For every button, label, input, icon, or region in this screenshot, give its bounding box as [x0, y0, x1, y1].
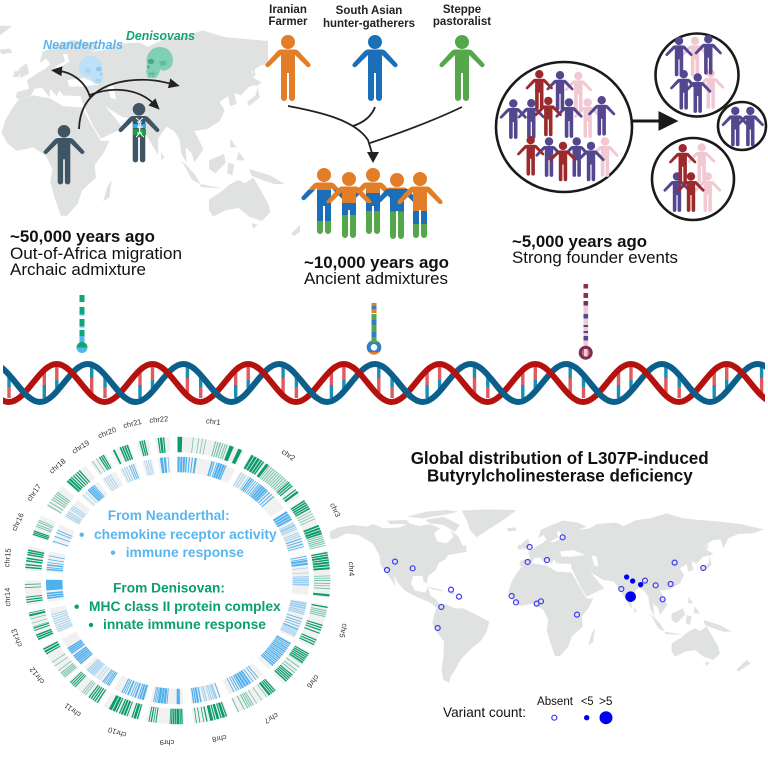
panel: 10,000 years ago admixture	[265, 4, 491, 288]
chart: circular genome plot of archaic introgression	[2, 414, 356, 747]
label: Iranian Farmer: Farmer	[268, 16, 308, 28]
markers: under five and over five sites	[624, 574, 643, 602]
labels: chromosome names: chr4	[347, 561, 356, 576]
labels: chromosome names: chr5	[337, 622, 350, 639]
icon: admixed group of five	[301, 168, 443, 239]
legend: variant count: >5	[599, 696, 612, 708]
text: 5,000 years ago: Strong founder events	[512, 248, 678, 267]
label: Steppe pastoralist: pastoralist	[433, 16, 491, 28]
labels: chromosome names: chr20	[97, 425, 117, 440]
labels: chromosome names: chr14	[3, 588, 12, 607]
text: 10,000 years ago: Ancient admixtures	[304, 269, 448, 288]
labels: chromosome names: chr21	[122, 417, 143, 430]
label: South Asian hunter-gatherers: hunter-gatherers	[323, 18, 415, 30]
labels: chromosome names: chr2	[280, 447, 297, 463]
panel: 50,000 years ago migration	[0, 25, 325, 279]
labels: chromosome names: chr6	[305, 673, 321, 690]
text: 50,000 years ago: Out-of-Africa migration	[10, 244, 182, 263]
text: 10,000 years ago: ~10,000 years ago	[304, 253, 449, 272]
labels: chromosome names: chr1	[206, 416, 221, 427]
labels: chromosome names: chr10	[107, 725, 128, 740]
legend: variant count	[443, 696, 612, 724]
text: Denisovan enrichment	[74, 580, 281, 632]
label: South Asian hunter-gatherers: South Asian	[336, 5, 402, 17]
labels: chromosome names: chr22	[149, 414, 169, 425]
chart: outer ring, Denisovan segments	[33, 444, 322, 716]
map: out-of-Africa world map	[0, 26, 300, 236]
title: global distribution map: Global distribution of L307P-induced	[411, 448, 709, 468]
text: Denisovan enrichment: From Denisovan:	[113, 580, 225, 596]
text: Neanderthal enrichment	[80, 507, 277, 560]
icon: blue person	[352, 35, 398, 101]
labels: chromosome names: chr12	[28, 665, 46, 686]
arrow: founder split	[632, 114, 675, 128]
text: Neanderthal enrichment: immune response	[126, 544, 244, 560]
labels: chromosome names: chr3	[328, 501, 342, 518]
icon: pin 5,000 years	[579, 284, 593, 360]
title: global distribution map: Butyrylcholinesterase deficiency	[427, 466, 693, 486]
arrow: migration to South Asia	[90, 90, 154, 104]
labels: chromosome names: chr18	[47, 457, 67, 476]
legend: variant count: Variant count:	[443, 704, 526, 720]
title: global distribution map	[411, 448, 709, 486]
labels: chromosome names: chr9	[160, 738, 174, 747]
labels: chromosome names: chr17	[25, 482, 43, 503]
map: lower world distribution map background	[330, 509, 763, 683]
chart: variant sites on map	[384, 535, 706, 630]
icon: pin 50,000 years	[76, 295, 88, 353]
label: Denisovans: Denisovans	[126, 29, 195, 43]
legend: variant count: <5	[581, 696, 594, 708]
icon: founder circle bottom	[652, 138, 734, 220]
labels: chromosome names: chr13	[9, 627, 24, 648]
text: Neanderthal enrichment: chemokine receptor activity	[94, 526, 277, 542]
panel: 5,000 years ago founder events	[496, 34, 766, 267]
labels: chromosome names: chr11	[63, 701, 83, 719]
icon: founder circle top	[656, 34, 738, 116]
arrow: merging ancestry lines	[288, 106, 462, 163]
text: 50,000 years ago: ~50,000 years ago	[10, 227, 155, 246]
markers: absent sites	[384, 535, 706, 630]
label: Steppe pastoralist: Steppe	[443, 4, 481, 16]
labels: chromosome names: chr19	[70, 438, 91, 456]
text: 5,000 years ago	[512, 232, 678, 267]
labels: chromosome names: chr7	[263, 711, 280, 726]
icon: admixed person with DNA	[119, 103, 159, 162]
arrow: migration to East Asia	[79, 80, 172, 129]
text: Neanderthal enrichment: From Neanderthal:	[108, 507, 230, 523]
icon: large population circle	[496, 62, 632, 192]
icon: founder circle right	[718, 102, 766, 150]
text: Denisovan enrichment: innate immune response	[103, 616, 266, 632]
chart: DNA double helix timeline	[0, 364, 768, 402]
icon: green person	[439, 35, 485, 101]
icon: African person	[44, 125, 84, 184]
text: 5,000 years ago: ~5,000 years ago	[512, 232, 647, 251]
labels: chromosome names	[2, 414, 356, 747]
text: 50,000 years ago: Archaic admixture	[10, 260, 146, 279]
label: Neanderthals: Neanderthals	[43, 38, 123, 52]
icon: Neanderthal skull	[79, 56, 103, 84]
labels: chromosome names: chr16	[10, 512, 26, 532]
icon: pin 10,000 years	[367, 303, 381, 355]
text: Denisovan enrichment: MHC class II protein complex	[89, 598, 281, 614]
icon: Denisovan skull	[146, 47, 173, 78]
labels: chromosome names: chr8	[211, 733, 227, 744]
arrow: migration to Europe	[59, 71, 90, 97]
chart: inner ring, Neanderthal segments	[54, 464, 301, 696]
text: 50,000 years ago	[10, 227, 182, 279]
labels: chromosome names: chr15	[2, 548, 13, 568]
icon: orange person	[265, 35, 311, 101]
text: 10,000 years ago	[304, 253, 449, 288]
legend: variant count: Absent	[537, 696, 574, 708]
label: Iranian Farmer: Iranian	[269, 4, 307, 16]
